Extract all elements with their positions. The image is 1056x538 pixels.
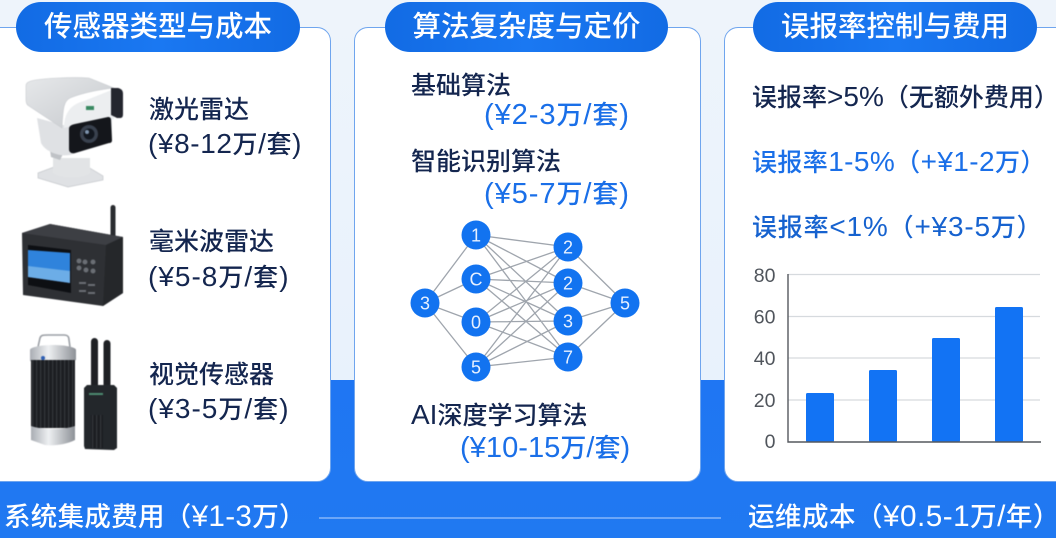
- heading: sensor types: [16, 2, 300, 52]
- text: basic algorithm: 基础算法: [411, 72, 511, 100]
- text: lidar: 激光雷达: [149, 96, 249, 124]
- text: vision sensor: 视觉传感器: [149, 361, 274, 389]
- chart: bar chart: 60: [754, 306, 776, 328]
- heading: false alarm cost: 误报率控制与费用: [781, 11, 1009, 43]
- panel: false alarm rate: [724, 27, 1056, 482]
- chart: bar chart: [754, 265, 1041, 452]
- chart: bar chart: 20: [754, 390, 776, 412]
- text: smart algorithm price: (¥5-7万/套): [484, 178, 630, 210]
- icon: vision sensor and transmitter: [30, 334, 118, 451]
- chart: neural network diagram: 2: [563, 274, 573, 294]
- chart: neural network diagram: 5: [620, 294, 630, 314]
- chart: neural network diagram: 2: [563, 238, 573, 258]
- text: operating cost: 运维成本（¥0.5-1万/年）: [748, 500, 1056, 533]
- text: AI deep learning algorithm: AI深度学习算法: [411, 399, 587, 430]
- text: AI algorithm price: (¥10-15万/套): [460, 432, 630, 464]
- heading: false alarm cost: [753, 2, 1037, 52]
- chart: neural network diagram: 7: [563, 348, 573, 368]
- text: mmwave radar: 毫米波雷达: [149, 228, 274, 256]
- bottom blue band: [0, 380, 1056, 538]
- heading: algorithms: [385, 2, 668, 52]
- chart: bar chart: 40: [754, 348, 776, 370]
- panel: sensor types: [0, 27, 331, 482]
- panel: algorithms: [354, 27, 701, 482]
- icon: lidar camera: [25, 76, 124, 188]
- text: basic algorithm price: (¥2-3万/套): [484, 99, 630, 131]
- text: system integration cost: 系统集成费用（¥1-3万）: [4, 500, 306, 533]
- heading: sensor types: 传感器类型与成本: [44, 11, 272, 43]
- text: smart recognition algorithm: 智能识别算法: [411, 148, 561, 176]
- chart: neural network diagram: 3: [563, 312, 573, 332]
- text: false alarm below 1%: 误报率<1%（+¥3-5万）: [752, 211, 1042, 242]
- text: mmwave price: (¥5-8万/套): [148, 261, 290, 292]
- chart: neural network diagram: 5: [471, 358, 481, 378]
- text: lidar price: (¥8-12万/套): [148, 128, 302, 159]
- text: false alarm above 5%: 误报率>5%（无额外费用）: [752, 81, 1056, 112]
- icon: millimetre wave radar unit: [21, 204, 124, 307]
- chart: neural network diagram: C: [470, 270, 482, 290]
- chart: neural network diagram: 3: [420, 294, 430, 314]
- chart: neural network diagram: 0: [471, 312, 481, 332]
- divider: [319, 517, 721, 518]
- chart: neural network diagram: [410, 220, 640, 382]
- text: false alarm 1-5%: 误报率1-5%（+¥1-2万）: [752, 146, 1046, 177]
- text: vision price: (¥3-5万/套): [148, 393, 290, 424]
- heading: algorithms: 算法复杂度与定价: [412, 11, 640, 43]
- chart: neural network diagram: 1: [471, 226, 481, 246]
- chart: bar chart: 80: [754, 265, 776, 287]
